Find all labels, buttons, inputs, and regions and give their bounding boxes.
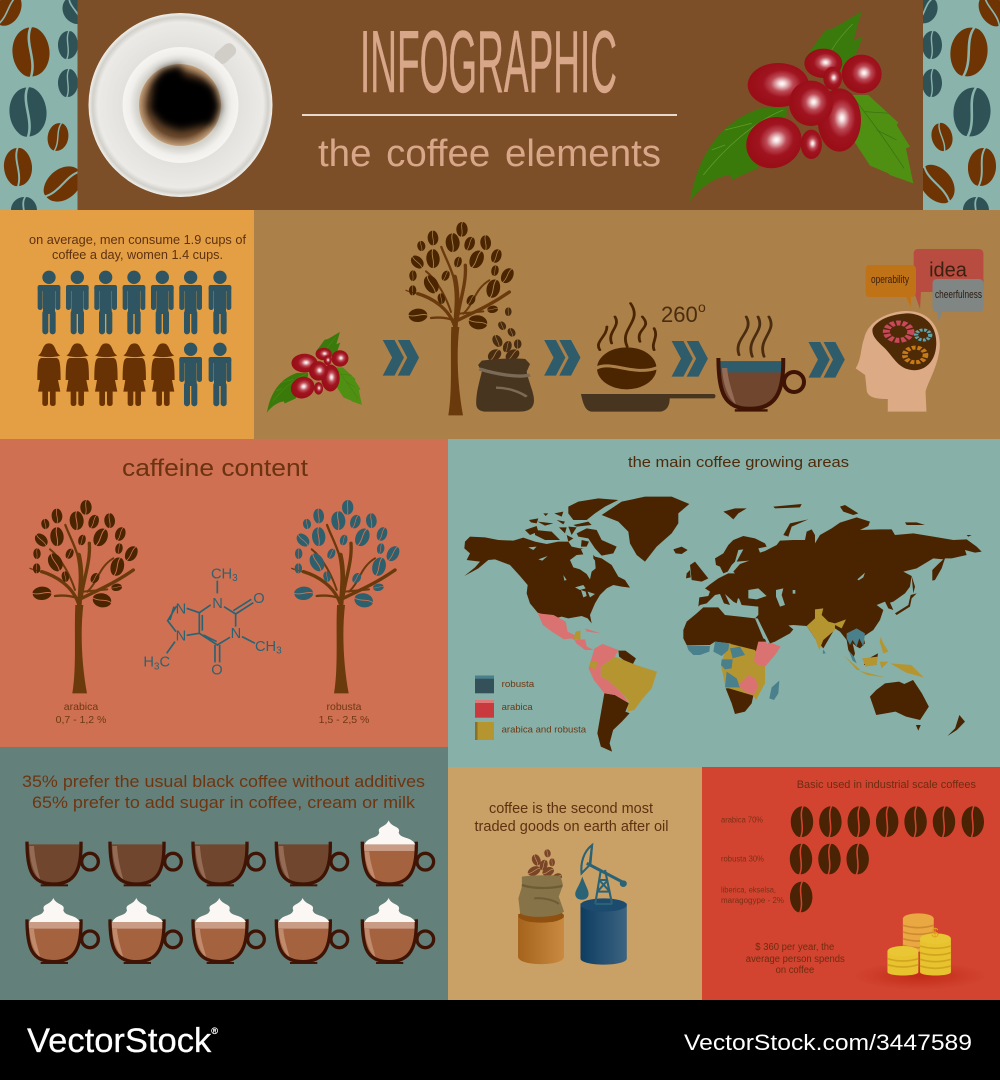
caffeine molecule bbox=[143, 566, 282, 678]
caffeine molecule: CH bbox=[211, 566, 232, 582]
oil barrel and pump bbox=[575, 845, 627, 965]
cups grid bbox=[27, 820, 434, 964]
robusta label: robusta bbox=[326, 701, 362, 713]
traded goods background bbox=[448, 767, 702, 1000]
caffeine molecule: O bbox=[253, 591, 265, 607]
yellow arabica and robusta regions bbox=[573, 631, 924, 712]
right coin stack bbox=[920, 933, 951, 975]
spending text: average person spends bbox=[746, 954, 845, 965]
spending text: $ 360 per year, the bbox=[755, 942, 835, 953]
bubble: idea: idea bbox=[929, 260, 968, 282]
caffeine molecule: 3 bbox=[154, 661, 160, 672]
legend: arabica and robusta: arabica and robusta bbox=[502, 725, 587, 736]
caffeine molecule: CH bbox=[255, 639, 276, 655]
africa robusta zones bbox=[687, 642, 779, 700]
temperature label: o bbox=[698, 299, 706, 315]
traded goods text: traded goods on earth after oil bbox=[474, 818, 668, 835]
footer background bbox=[0, 1000, 1000, 1080]
left bean pattern bbox=[0, 0, 92, 223]
robusta 30% row: robusta 30% bbox=[721, 855, 764, 864]
caffeine background bbox=[0, 439, 448, 747]
coffee cup top view bbox=[88, 13, 272, 197]
arabica label: arabica bbox=[64, 701, 98, 713]
caffeine molecule: 3 bbox=[232, 573, 238, 584]
central america and south america arabica bbox=[538, 613, 629, 703]
other varieties row bbox=[721, 882, 812, 912]
bubble: operability: operability bbox=[871, 274, 909, 286]
caffeine molecule: N bbox=[176, 602, 186, 618]
north america and greenland bbox=[464, 497, 689, 623]
other varieties row: liberica, ekselsa, bbox=[721, 886, 776, 895]
pattern background left bbox=[0, 0, 80, 210]
consumption text: coffee a day, women 1.4 cups. bbox=[52, 248, 223, 262]
footer brand: ® bbox=[211, 1026, 218, 1036]
footer url: VectorStock.com/3447589 bbox=[684, 1030, 972, 1055]
head with gears bbox=[856, 311, 940, 412]
map background bbox=[448, 439, 1000, 767]
central africa base bbox=[721, 643, 765, 700]
panel: cream preferences bbox=[0, 747, 448, 1000]
two men in second row bbox=[179, 343, 231, 406]
cup with steam bbox=[718, 317, 804, 412]
dollar sign: $ bbox=[931, 925, 939, 940]
traded goods text: coffee is the second most bbox=[489, 800, 654, 817]
africa bbox=[683, 607, 781, 714]
south america and oceania in brown bbox=[597, 651, 965, 752]
robusta tree bbox=[292, 500, 402, 693]
preferences background bbox=[0, 747, 448, 1000]
arabica label: 0,7 - 1,2 % bbox=[56, 714, 106, 726]
coin stacks bbox=[853, 913, 987, 990]
cup row 1 bbox=[27, 820, 434, 886]
caffeine molecule: O bbox=[211, 662, 223, 678]
pictogram people bbox=[37, 271, 231, 406]
men row bbox=[38, 271, 231, 334]
hudson bay and lakes bbox=[528, 547, 596, 597]
bubble: cheerfulness: cheerfulness bbox=[935, 289, 982, 301]
map heading: the main coffee growing areas bbox=[628, 454, 849, 471]
india bbox=[807, 608, 846, 650]
pattern background right bbox=[920, 0, 1000, 210]
panel: traded goods bbox=[448, 767, 702, 1000]
pan and roasting bean bbox=[581, 303, 715, 412]
subtitle: the coffee elements bbox=[318, 133, 661, 175]
women row bbox=[37, 343, 175, 406]
left coin stack bbox=[887, 946, 918, 975]
caffeine molecule: N bbox=[212, 596, 223, 612]
map legend bbox=[475, 676, 587, 740]
southeast asia robusta bbox=[823, 628, 865, 663]
world map bbox=[464, 497, 982, 752]
caffeine molecule: H bbox=[143, 655, 154, 671]
preferences text: 35% prefer the usual black coffee without additives bbox=[22, 772, 425, 791]
arabica 70% row bbox=[721, 806, 984, 837]
eurasia bbox=[686, 504, 982, 663]
panel: world map bbox=[448, 439, 1000, 767]
preferences text: 65% prefer to add sugar in coffee, cream or milk bbox=[32, 793, 416, 812]
robusta label: 1,5 - 2,5 % bbox=[319, 714, 369, 726]
caffeine molecule: C bbox=[159, 655, 170, 671]
title underline bbox=[302, 114, 677, 116]
process background bbox=[254, 210, 1000, 439]
caffeine molecule: N bbox=[176, 628, 186, 644]
panel: caffeine content bbox=[0, 439, 448, 747]
arabica tree bbox=[30, 500, 140, 693]
africa north and south in brown bbox=[683, 607, 770, 714]
panel: industrial scale coffees bbox=[702, 767, 1000, 1000]
right bean pattern bbox=[908, 0, 1000, 223]
spending text: on coffee bbox=[776, 965, 815, 976]
africa arabica zones bbox=[738, 642, 781, 695]
robusta 30% row bbox=[721, 844, 869, 874]
header brown band bbox=[78, 0, 923, 210]
other varieties row: maragogype - 2% bbox=[721, 896, 784, 905]
coffee berries illustration bbox=[690, 12, 913, 202]
arabica 70% row: arabica 70% bbox=[721, 816, 763, 825]
industrial background bbox=[702, 767, 1000, 1000]
footer brand: VectorStock bbox=[27, 1022, 208, 1060]
header panel: INFOGRAPHIC bbox=[360, 12, 617, 111]
consumption background bbox=[0, 210, 254, 439]
temperature label: 260 bbox=[661, 302, 698, 327]
header panel bbox=[0, 0, 1000, 223]
falling beans and sack bbox=[476, 307, 534, 412]
back coin stack bbox=[903, 913, 934, 952]
arrows bbox=[383, 340, 845, 378]
legend: robusta: robusta bbox=[502, 679, 535, 690]
legend: arabica: arabica bbox=[502, 702, 533, 713]
coffee sack on barrel bbox=[518, 849, 564, 964]
footer bar bbox=[0, 1000, 1000, 1080]
caffeine heading: caffeine content bbox=[122, 455, 308, 482]
speech bubbles bbox=[866, 249, 983, 322]
small berries bbox=[267, 332, 362, 413]
seas bbox=[727, 549, 865, 644]
caffeine molecule: N bbox=[231, 626, 241, 642]
cup row 2 bbox=[27, 898, 434, 964]
coffee tree bbox=[406, 222, 516, 415]
industrial heading: Basic used in industrial scale coffees bbox=[797, 779, 976, 791]
caffeine molecule: 3 bbox=[276, 646, 282, 657]
panel: coffee process bbox=[254, 210, 1000, 439]
consumption text: on average, men consume 1.9 cups of bbox=[29, 233, 247, 247]
panel: consumption bbox=[0, 210, 254, 439]
